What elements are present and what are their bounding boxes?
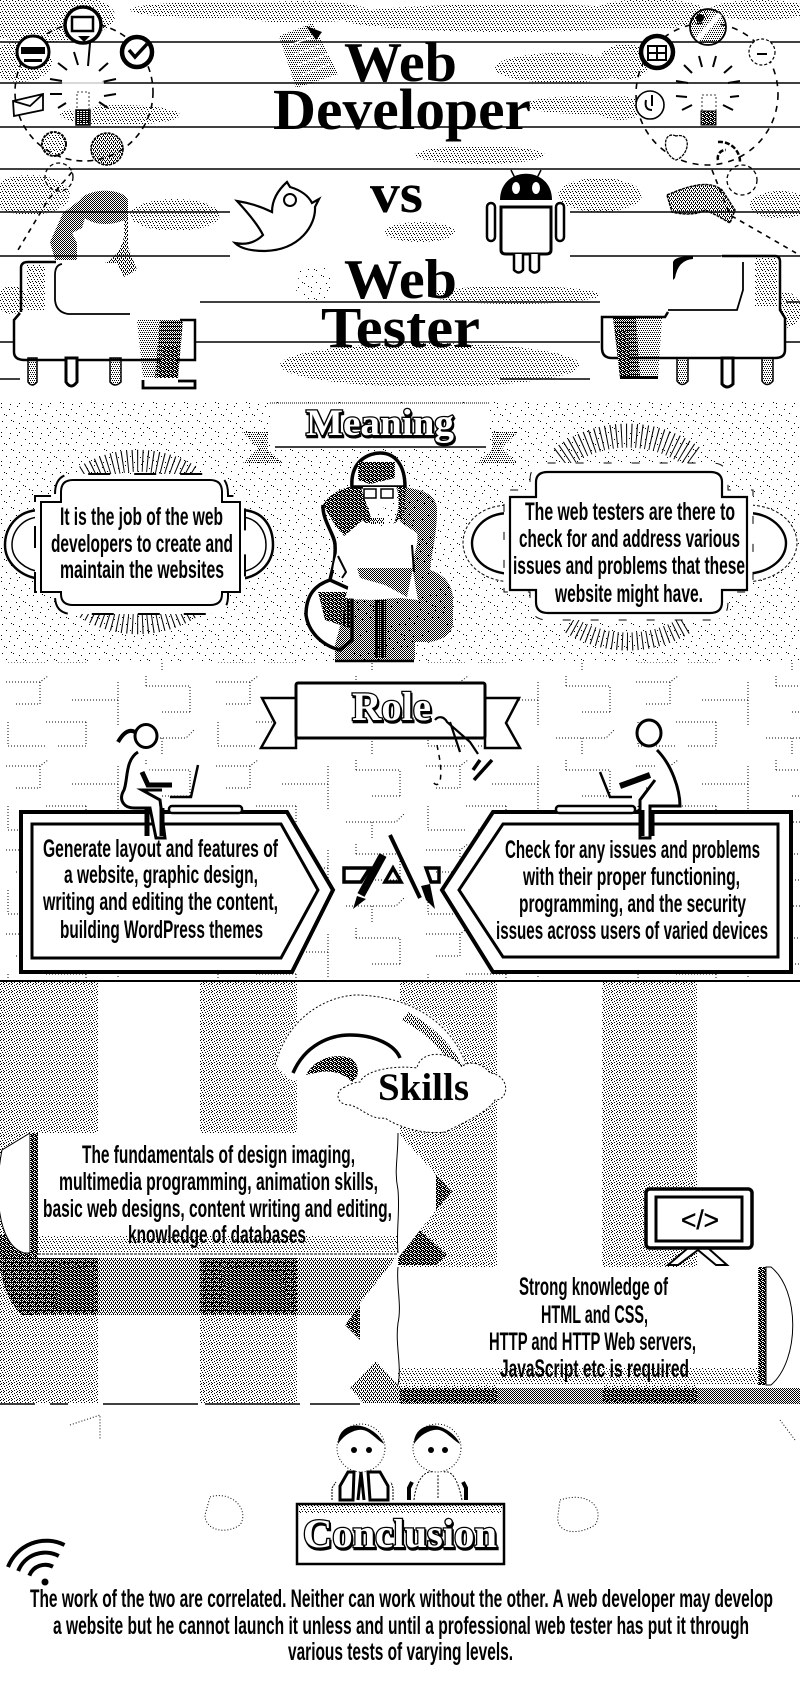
icon group: right idea ring bbox=[636, 9, 796, 253]
icon: document bbox=[279, 23, 338, 88]
illustration: pencil two bbox=[345, 1267, 800, 1404]
icon: dotted flower bbox=[296, 264, 333, 301]
icon: rainbow bbox=[275, 995, 467, 1090]
title: tester: Tester bbox=[321, 295, 480, 360]
text: tester skills: HTML and CSS, bbox=[541, 1301, 648, 1329]
heading: meaning: Meaning bbox=[306, 403, 455, 444]
text: developer skills: multimedia programming, animation skills, bbox=[59, 1168, 378, 1196]
icon: windows badge bbox=[641, 36, 673, 68]
panel: header bbox=[0, 0, 800, 400]
icon: power bbox=[636, 91, 664, 119]
icon: cloud bbox=[338, 1054, 506, 1133]
text: developer role: a website, graphic design, bbox=[64, 861, 258, 889]
text: tester skills: JavaScript etc is required bbox=[500, 1355, 689, 1383]
panel: tester meaning plaque bbox=[463, 436, 797, 642]
text: developer meaning: maintain the websites bbox=[60, 556, 224, 584]
icon: monitor badge bbox=[65, 7, 101, 43]
title: web developer: Web bbox=[344, 32, 457, 94]
text: tester meaning: website might have. bbox=[554, 580, 703, 608]
text: code symbol: </> bbox=[681, 1205, 719, 1235]
icon: hand with pen bbox=[432, 717, 492, 785]
illustration: man on chair bbox=[602, 185, 785, 387]
icon: apple bbox=[666, 135, 687, 160]
illustration: female developer at laptop bbox=[118, 724, 242, 838]
panel: conclusion bbox=[8, 1415, 795, 1666]
icon: stamp badge bbox=[91, 133, 123, 165]
heading: vs: vs bbox=[370, 163, 423, 225]
banner: meaning bbox=[242, 403, 518, 463]
text: tester role bbox=[496, 836, 768, 945]
panel: tester role bbox=[442, 812, 791, 972]
text: tester skills bbox=[489, 1273, 696, 1383]
title: developer: Developer bbox=[273, 77, 531, 142]
text: conclusion body bbox=[30, 1585, 773, 1666]
panel: developer role bbox=[21, 812, 333, 972]
text: developer skills: The fundamentals of design imaging, bbox=[82, 1141, 355, 1169]
icon: android bbox=[487, 170, 564, 272]
text: tester meaning bbox=[513, 498, 745, 608]
title: web: Web bbox=[344, 249, 457, 311]
icon: design tools bbox=[344, 835, 439, 909]
heading: skills: Skills bbox=[378, 1066, 469, 1109]
icon: globe badge bbox=[42, 132, 66, 156]
illustration: pencil one bbox=[0, 1133, 452, 1315]
text: developer meaning: developers to create and bbox=[51, 530, 233, 558]
icon: twitter bird bbox=[235, 182, 319, 251]
text: developer role: building WordPress themes bbox=[60, 916, 263, 944]
icon: smiley bbox=[749, 39, 775, 65]
icon: mail bbox=[13, 94, 43, 116]
icon: wifi bbox=[8, 1541, 64, 1586]
illustration: two people bbox=[332, 1424, 466, 1500]
banner: role bbox=[261, 683, 520, 748]
panel: meaning bbox=[0, 400, 800, 662]
panel: skills bbox=[0, 980, 800, 1404]
text: developer meaning bbox=[51, 503, 233, 584]
icon group: left idea ring bbox=[13, 7, 153, 250]
illustration: male tester at laptop bbox=[556, 720, 680, 838]
text: developer meaning: It is the job of the web bbox=[60, 503, 223, 531]
text: developer skills: basic web designs, content writing and editing, bbox=[43, 1195, 392, 1223]
text: tester skills: Strong knowledge of bbox=[519, 1273, 668, 1301]
heading: conclusion: Conclusion bbox=[303, 1511, 497, 1556]
text: developer role bbox=[42, 835, 278, 944]
text: developer skills bbox=[43, 1141, 392, 1249]
text: developer role: writing and editing the content, bbox=[42, 888, 278, 916]
icon: rss bbox=[718, 142, 740, 162]
icon: chat badge bbox=[17, 36, 49, 68]
illustration: woman on chair bbox=[14, 191, 195, 388]
panel: developer meaning plaque bbox=[5, 461, 273, 624]
text: conclusion body: various tests of varying levels. bbox=[288, 1638, 513, 1666]
panel: role bbox=[0, 662, 800, 980]
text: developer role: Generate layout and features of bbox=[43, 835, 278, 863]
icon: tools badge bbox=[690, 9, 726, 45]
icon: check badge bbox=[122, 37, 152, 67]
text: developer skills: knowledge of databases bbox=[128, 1221, 306, 1249]
heading: role: Role bbox=[352, 684, 431, 729]
illustration: woman in armchair bbox=[306, 453, 453, 661]
banner: conclusion bbox=[297, 1504, 504, 1564]
icon: code monitor bbox=[646, 1189, 752, 1265]
